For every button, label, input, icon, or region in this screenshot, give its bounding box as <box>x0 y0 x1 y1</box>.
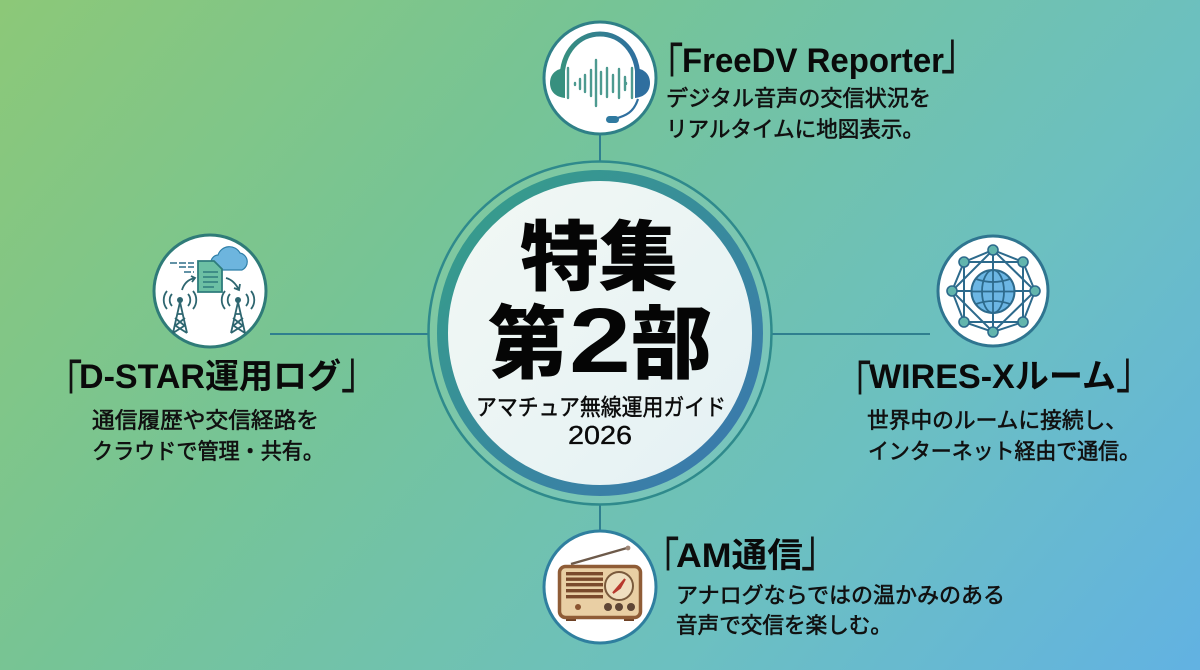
hub subtitle <box>476 394 726 450</box>
description: インターネット経由で通信。 <box>868 439 1140 464</box>
panel: WIRES-X <box>835 236 1152 464</box>
icon: towers and cloud <box>154 235 266 347</box>
hub title: 第 <box>488 300 567 389</box>
heading: 「 <box>647 39 683 99</box>
heading: 」 <box>801 518 837 578</box>
heading: 「 <box>643 533 679 593</box>
heading: 」 <box>941 21 977 81</box>
hub subtitle: アマチュア無線運用ガイド <box>476 394 726 420</box>
heading: FreeDV Reporter <box>682 42 944 80</box>
description: 音声で交信を楽しむ。 <box>676 613 892 638</box>
panel: AM通信 <box>544 518 1005 643</box>
hub title: 部 <box>631 300 712 389</box>
heading: 「 <box>46 356 82 416</box>
icon: globe network <box>938 236 1048 346</box>
description <box>867 408 1140 464</box>
heading: WIRES-Xルーム <box>869 358 1116 396</box>
hub title: 2 <box>569 290 631 392</box>
heading: 」 <box>341 340 377 400</box>
connector lines <box>270 135 930 531</box>
description <box>92 408 324 464</box>
heading: D-STAR運用ログ <box>79 358 341 396</box>
panel: FreeDV Reporter <box>544 21 977 142</box>
heading <box>46 340 377 416</box>
description: リアルタイムに地図表示。 <box>666 117 924 142</box>
hub subtitle: 2026 <box>568 420 632 450</box>
description <box>676 583 1005 638</box>
heading: 「 <box>835 357 871 417</box>
central hub <box>428 162 772 504</box>
icon: vintage radio <box>544 531 656 643</box>
heading: 」 <box>1116 340 1152 400</box>
description: クラウドで管理・共有。 <box>92 439 324 464</box>
hub title: 特集 <box>520 216 678 301</box>
description: デジタル音声の交信状況を <box>666 86 931 111</box>
icon: headset <box>544 22 656 134</box>
description: 世界中のルームに接続し、 <box>867 408 1127 433</box>
heading: AM通信 <box>676 537 803 575</box>
description <box>666 86 931 142</box>
panel: D-STAR <box>46 235 377 464</box>
hub title <box>488 216 712 392</box>
heading <box>647 21 977 99</box>
heading <box>835 340 1152 417</box>
description: 通信履歴や交信経路を <box>92 408 319 433</box>
heading <box>643 518 837 593</box>
description: アナログならではの温かみのある <box>676 583 1005 608</box>
